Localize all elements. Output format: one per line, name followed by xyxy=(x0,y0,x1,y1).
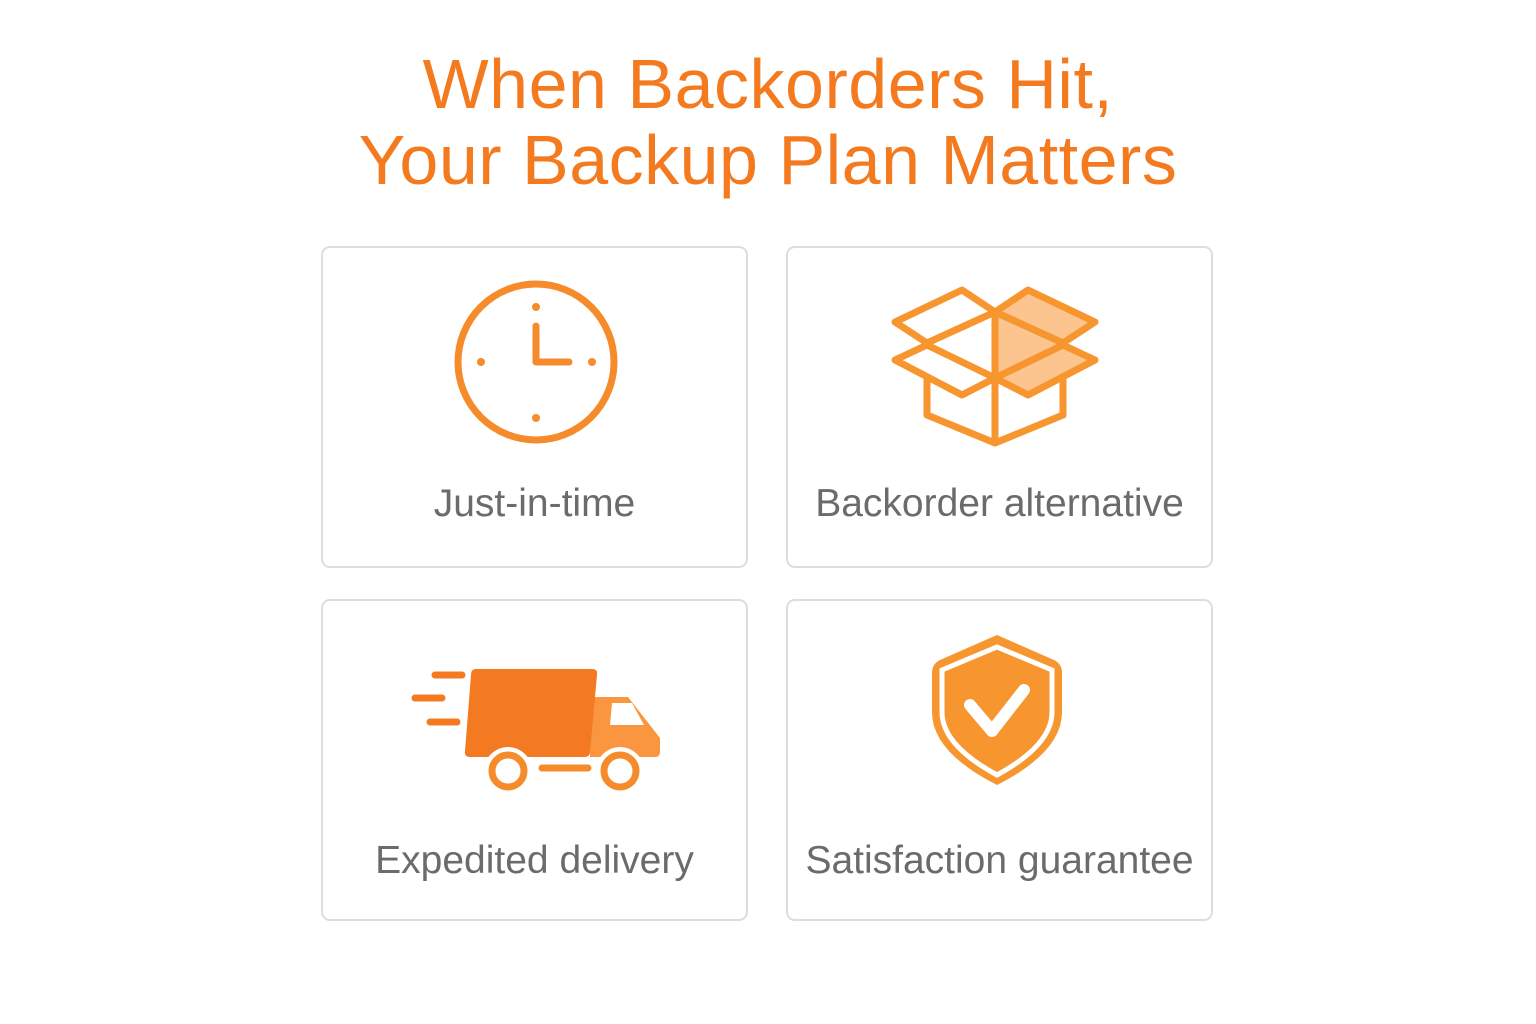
panel: satisfaction guarantee xyxy=(786,599,1213,921)
label: just-in-time: Just-in-time xyxy=(434,482,635,525)
icon: open box xyxy=(895,290,1095,443)
panel: just-in-time xyxy=(321,246,748,568)
title: Your Backup Plan Matters xyxy=(359,121,1177,199)
label: satisfaction guarantee: Satisfaction guarantee xyxy=(805,839,1194,882)
title: When Backorders Hit, xyxy=(423,45,1113,123)
icon: clock xyxy=(458,284,614,440)
icon: delivery truck xyxy=(415,669,660,795)
panel: expedited delivery xyxy=(321,599,748,921)
icon: shield check xyxy=(932,635,1062,785)
label: backorder alternative: Backorder alternative xyxy=(815,482,1184,525)
label: expedited delivery: Expedited delivery xyxy=(375,839,694,882)
title xyxy=(359,45,1177,199)
panel: backorder alternative xyxy=(786,246,1213,568)
